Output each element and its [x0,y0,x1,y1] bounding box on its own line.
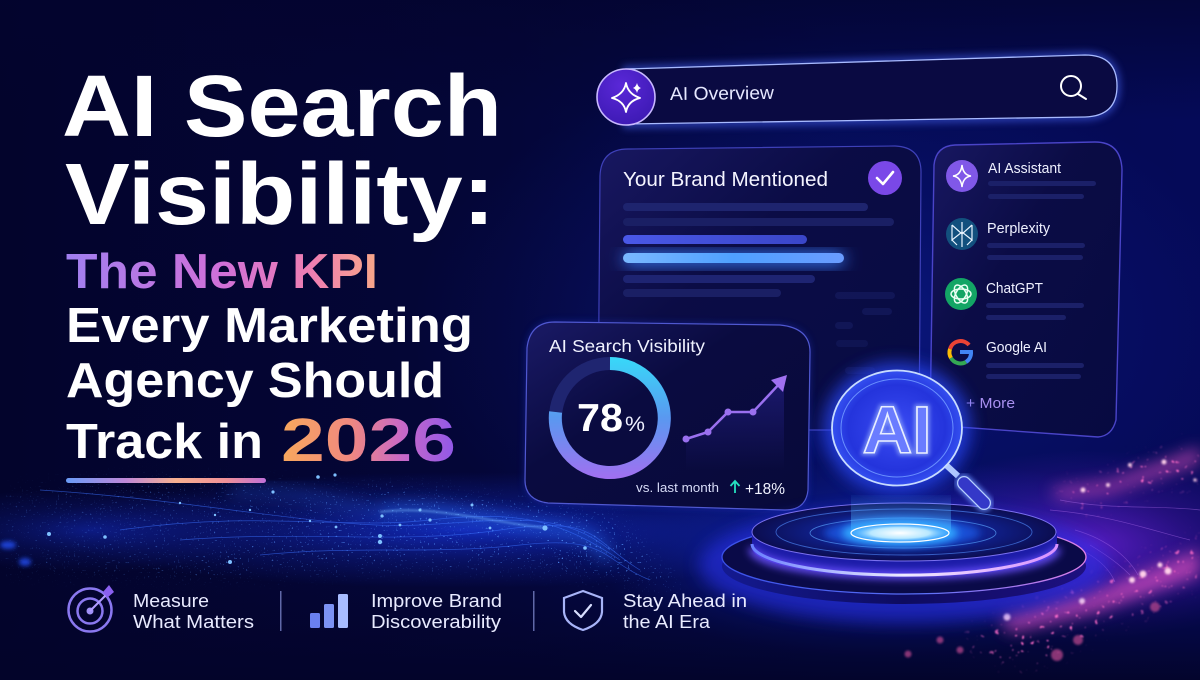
icon: AI assistant [946,160,978,192]
panel: AI platforms list [930,142,1122,437]
icon: bar chart [310,594,348,628]
benefit text: measure: What Matters [133,612,254,632]
icon: AI magnifying glass [823,362,984,503]
label: AI Assistant: AI Assistant [988,161,1061,177]
comparison text: vs. last month [636,480,719,495]
subtitle: Agency Should: Agency Should [66,354,444,408]
panel: your brand mentioned card [598,146,921,430]
light beam [851,495,951,532]
panel: AI search visibility card [525,322,810,510]
icon: sparkle orb [597,69,655,125]
text placeholder bars [623,203,895,374]
icon: Google G [949,341,971,363]
title underline [66,478,266,483]
donut chart 78%: % [625,413,645,436]
icon: Perplexity [946,218,978,250]
benefit text: stay ahead: Stay Ahead in [623,591,747,611]
subtitle: Track in: Track in [66,415,263,469]
label: ChatGPT: ChatGPT [986,281,1043,297]
glowing core [842,520,958,546]
lens [832,370,962,486]
title line: AI Search: AI Search [62,58,502,155]
handle [945,464,984,503]
year 2026: 2026 [281,406,456,474]
placeholder lines [988,181,1096,199]
card heading: Your Brand Mentioned [623,169,828,191]
benefit text: discoverability: Improve Brand [371,591,502,611]
benefit text: stay ahead [623,591,747,632]
placeholder lines [986,303,1084,320]
benefit text: discoverability: Discoverability [371,612,501,632]
placeholder lines [987,243,1085,260]
change value: +18% [745,481,785,498]
search bar [597,55,1117,125]
icon: shield check [564,591,602,630]
platform pedestal [699,495,1109,623]
lens letters: AI [862,393,932,468]
icon: up arrow [730,481,740,493]
subtitle: Every Marketing: Every Marketing [66,299,473,353]
title [62,58,502,474]
donut chart 78%: 78 [577,397,623,440]
subtitle: The New KPI: The New KPI [66,245,378,299]
search bar text: AI Overview [670,82,775,104]
title line: Visibility: Visibility: [65,146,495,243]
placeholder lines [986,363,1084,379]
benefit text: measure [133,591,254,632]
benefit text: stay ahead: the AI Era [623,612,711,632]
particle wave: pink [904,430,1200,680]
icon: check badge [868,161,902,195]
benefits row [68,585,747,632]
label: more: + More [966,395,1015,412]
benefit text: discoverability [371,591,502,632]
benefit text: measure: Measure [133,591,209,611]
icon: ChatGPT [945,278,977,310]
donut chart 78% [555,364,664,472]
icon: search magnifier [1061,76,1086,99]
line chart [682,375,787,470]
icon: target [68,585,114,632]
label: Google AI: Google AI [986,340,1047,356]
card heading: AI Search Visibility [549,336,705,356]
label: Perplexity: Perplexity [987,221,1051,237]
particle wave: blue network [0,468,681,594]
lens letters: AI [862,393,932,468]
